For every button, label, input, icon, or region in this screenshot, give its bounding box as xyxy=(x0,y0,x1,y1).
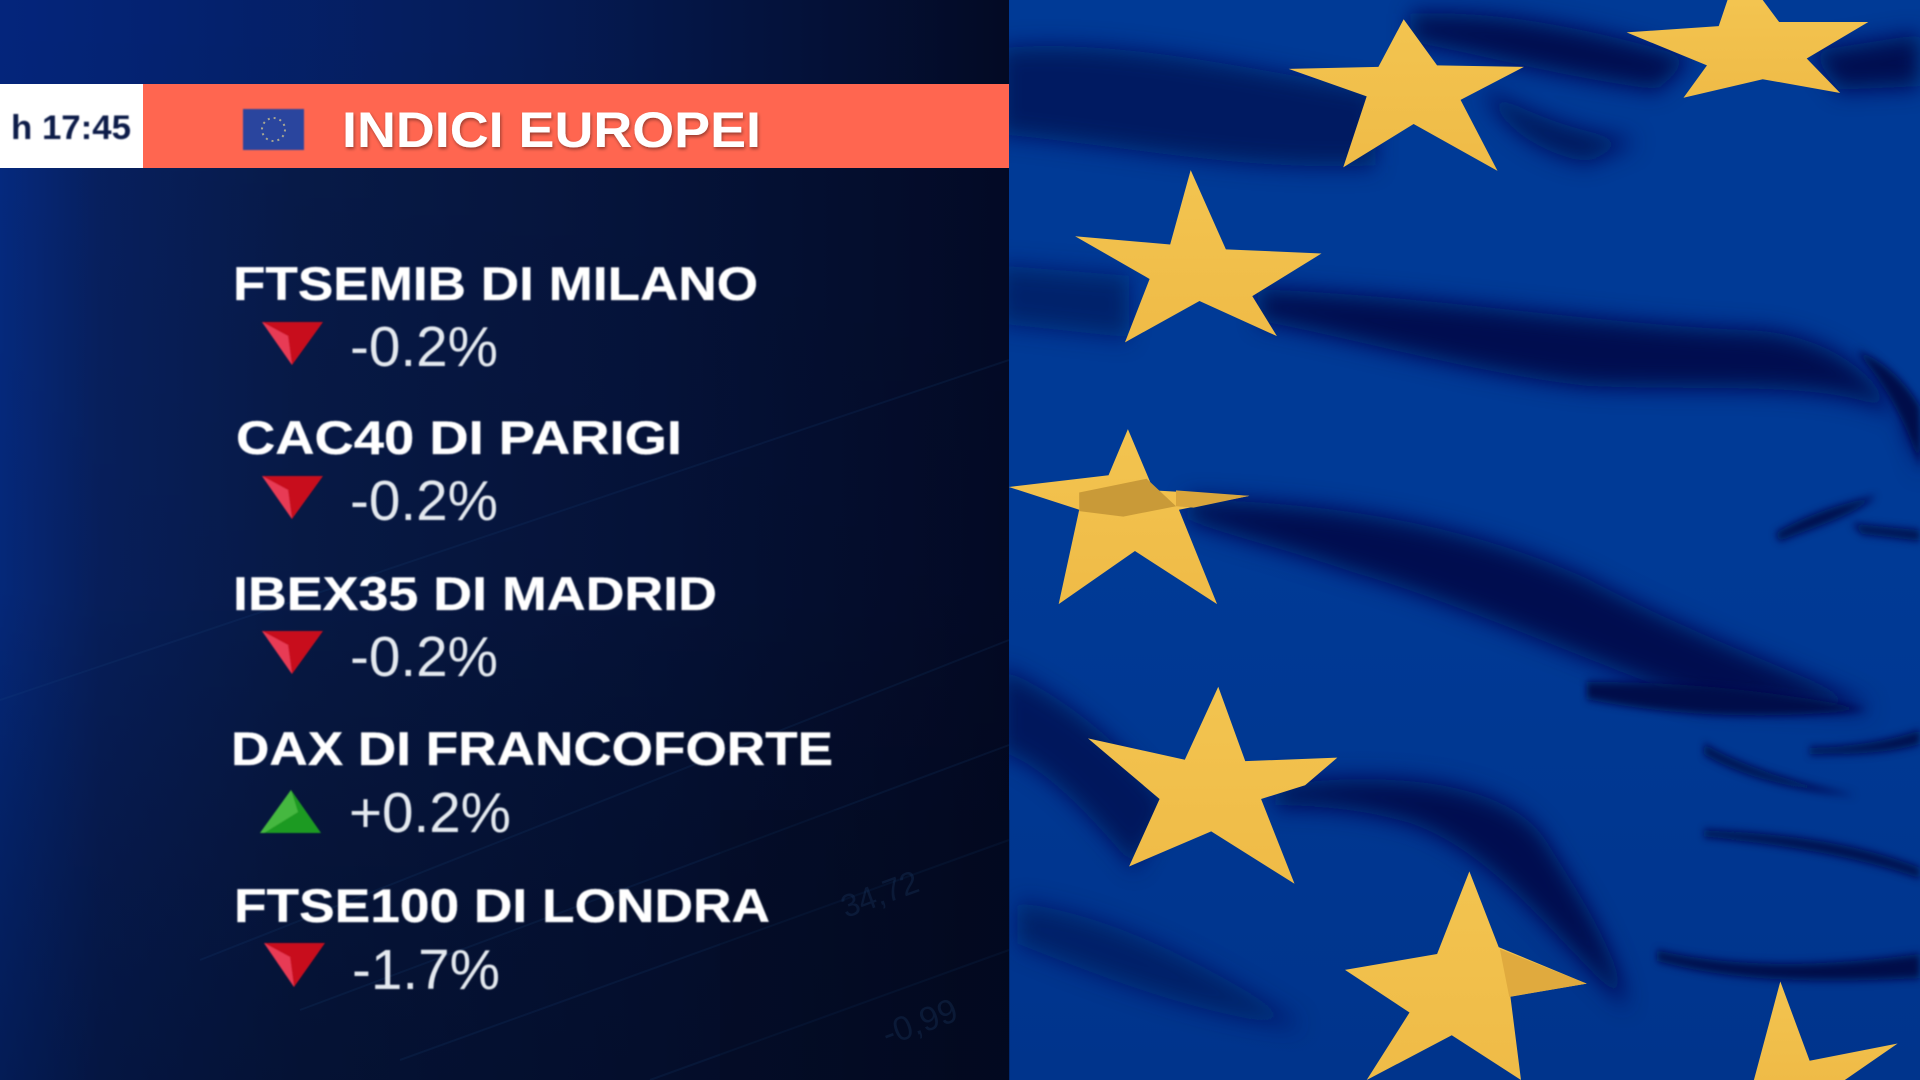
row: IBEX35: IBEX35 DI MADRID xyxy=(233,567,717,620)
row: FTSEMIB: -0.2% xyxy=(350,315,498,379)
icon: flag stars xyxy=(1009,0,1898,1080)
icon: down arrow xyxy=(264,943,325,987)
row: FTSEMIB: FTSEMIB DI MILANO xyxy=(233,257,758,310)
panel: dark market background: -0,99 xyxy=(877,991,963,1054)
row: FTSE100: FTSE100 DI LONDRA xyxy=(234,879,770,932)
row: FTSE100: -1.7% xyxy=(352,938,500,1002)
time badge xyxy=(0,84,143,168)
panel: dark market background: 34,72 xyxy=(836,863,923,925)
icon: down arrow xyxy=(262,631,323,674)
row: CAC40: CAC40 DI PARIGI xyxy=(236,411,682,464)
icon: up arrow xyxy=(260,790,321,833)
row: DAX: +0.2% xyxy=(349,781,511,845)
list of indices xyxy=(231,257,833,1002)
icon: down arrow xyxy=(262,476,323,519)
header banner xyxy=(0,84,1009,168)
row: FTSE100 xyxy=(234,879,770,1002)
row: DAX xyxy=(231,722,833,845)
row: CAC40: -0.2% xyxy=(350,469,498,533)
row: FTSEMIB xyxy=(233,257,758,379)
title: INDICI EUROPEI xyxy=(342,102,761,158)
time badge: h 17:45 xyxy=(11,109,131,147)
title bar xyxy=(143,84,1009,168)
row: DAX: DAX DI FRANCOFORTE xyxy=(231,722,833,775)
panel: EU flag photo xyxy=(1000,0,1920,1080)
icon: down arrow xyxy=(262,322,323,365)
row: IBEX35: -0.2% xyxy=(350,625,498,689)
row: IBEX35 xyxy=(233,567,717,689)
panel: dark market background xyxy=(0,0,1010,1080)
icon: EU flag xyxy=(243,109,304,150)
row: CAC40 xyxy=(236,411,682,533)
fabric folds xyxy=(1000,13,1920,1026)
